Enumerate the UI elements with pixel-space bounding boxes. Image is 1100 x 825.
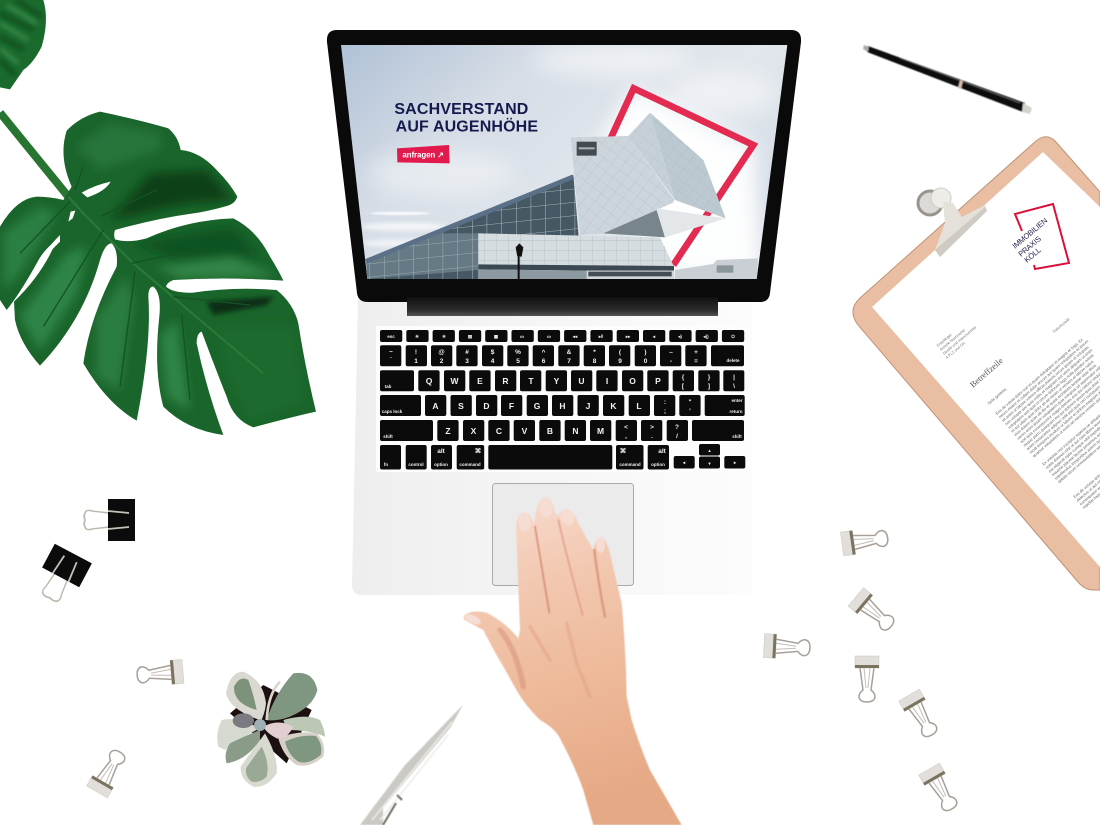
- key legends: G: [534, 401, 541, 411]
- key legends: ☀: [415, 334, 420, 339]
- letter paper: [872, 152, 1100, 567]
- key legends: /: [676, 433, 678, 440]
- key legends: P: [655, 376, 661, 386]
- key legends: shift: [383, 434, 393, 439]
- clipboard: [853, 137, 1100, 590]
- key legends: ⌘: [620, 447, 627, 455]
- key legends: ): [644, 349, 647, 356]
- corner leaf: [0, 0, 46, 89]
- key legends: *: [593, 349, 596, 356]
- key legends: ]: [708, 383, 710, 390]
- key legends: \: [733, 383, 735, 390]
- key legends: Y: [554, 376, 560, 386]
- key legends: #: [465, 349, 469, 356]
- key legends: ': [689, 408, 691, 415]
- silver clip right 1: [840, 526, 889, 556]
- key legends: B: [547, 426, 553, 436]
- key legends: X: [471, 426, 477, 436]
- key legends: `: [390, 357, 392, 364]
- key legends: ": [688, 399, 692, 406]
- key legends: 3: [465, 358, 469, 365]
- finger gaps: [500, 520, 605, 697]
- key legends: esc: [387, 334, 395, 339]
- key legends: $: [491, 349, 495, 356]
- key legends: ▭: [520, 334, 525, 339]
- keyboard well: [376, 326, 751, 472]
- silver clip right 4: [855, 656, 879, 702]
- key legends: |: [733, 374, 735, 381]
- street lamp: [516, 243, 523, 279]
- key legends: 7: [567, 358, 571, 365]
- key legends: 2: [440, 358, 444, 365]
- silver clip right 2: [848, 588, 899, 636]
- key legends: ◂): [677, 334, 682, 339]
- key legends: ▦: [494, 334, 499, 339]
- letter text: et aut ullam quia dolor sit ad minim ut veniam et labore natus: [1010, 359, 1094, 433]
- angular building: [571, 113, 726, 237]
- key legends: delete: [726, 358, 740, 363]
- key legends: M: [597, 426, 604, 436]
- letter text: Betreffzeile: [968, 355, 1005, 390]
- key legends: L: [636, 401, 642, 411]
- key legends: 4: [491, 358, 495, 365]
- key legends: R: [502, 376, 509, 386]
- key legends: ⌘: [475, 447, 482, 455]
- key legends: O: [629, 376, 636, 386]
- letter text: eius dolore quae ab illo et quasi architecto beatae vitae dicta: [1013, 362, 1098, 437]
- key legends: 1: [414, 358, 418, 365]
- laptop screen: [340, 40, 790, 290]
- key legends: <: [624, 424, 628, 431]
- silver clip right 3: [763, 634, 811, 660]
- glass hall: [366, 175, 579, 279]
- logo: [1011, 204, 1069, 269]
- letter text: Datumszeile: [1052, 317, 1071, 334]
- key legends: U: [578, 376, 585, 386]
- key legends: W: [450, 376, 459, 386]
- key legends: J: [586, 401, 591, 411]
- key legends: +: [694, 349, 698, 356]
- silver pen: [360, 705, 463, 825]
- key legends: 5: [516, 358, 520, 365]
- screen headline: AUF AUGENHÖHE: [396, 117, 538, 136]
- main leaf: [0, 112, 316, 435]
- key legends: S: [458, 401, 464, 411]
- logo: PRAXIS: [1017, 234, 1043, 259]
- key legends: control: [408, 462, 424, 467]
- key legends: >: [650, 424, 654, 431]
- trackpad: [492, 484, 634, 586]
- key legends: return: [729, 409, 743, 414]
- key legends: command: [619, 462, 641, 467]
- key legends: ▤: [468, 334, 473, 339]
- letter text: Sehr geehrte,: [986, 386, 1008, 406]
- key legends: D: [483, 401, 490, 411]
- laptop lid: [327, 30, 801, 302]
- letter text: Empfänger: [936, 332, 953, 348]
- key legends: ?: [675, 424, 679, 431]
- key legends: A: [432, 401, 439, 411]
- key legends: shift: [732, 434, 742, 439]
- key legends: 6: [542, 358, 546, 365]
- key legends: {: [682, 374, 685, 381]
- key legends: 8: [593, 358, 597, 365]
- key legends: ▾: [707, 461, 711, 466]
- key legends: V: [522, 426, 528, 436]
- key legends: [: [682, 383, 685, 390]
- key legends: (: [619, 349, 622, 356]
- letter text: Anrede Nachname: [939, 328, 966, 352]
- screen headline: SACHVERSTAND: [394, 101, 528, 118]
- key legends: ▭: [547, 334, 552, 339]
- key legends: .: [651, 433, 653, 440]
- key legends: ▴: [707, 448, 711, 453]
- logo: IMMOBILIEN: [1011, 216, 1049, 251]
- key legends: C: [496, 426, 502, 436]
- distant buildings: [675, 258, 758, 279]
- key legends: alt: [658, 448, 667, 455]
- silver clip right 6: [919, 763, 962, 815]
- key legends: :: [664, 399, 666, 406]
- pen: [863, 45, 1032, 114]
- key legends: –: [669, 349, 673, 356]
- keycaps: [380, 330, 745, 470]
- anfragen button: anfragen ↗: [402, 150, 444, 159]
- letter text: sed quia consequuntur magni dolores eos qui ratione sequi: [1019, 372, 1100, 444]
- key legends: -: [670, 358, 672, 365]
- key legends: F: [509, 401, 514, 411]
- letter text: rerum dolore et cullam dolor accum aut quam voluptatem et ipsum: [997, 338, 1090, 419]
- letter text: voluptatem sed quia et rerum dolorum fuga nulla pariatur omnis: [1007, 353, 1095, 430]
- screen headline: [394, 101, 538, 136]
- key legends: H: [559, 401, 566, 411]
- clouds: [360, 43, 780, 279]
- black binder clip 1: [84, 499, 135, 541]
- key legends: ◂◂: [572, 334, 578, 339]
- hinge: [407, 297, 718, 316]
- key legends: 0: [644, 358, 648, 365]
- red frame: [611, 88, 753, 265]
- key legends: Z: [445, 426, 451, 436]
- silver clip left 1: [136, 659, 184, 687]
- key legends: enter: [731, 398, 743, 403]
- letter text: [936, 317, 1100, 512]
- key legends: K: [610, 401, 617, 411]
- letter text: Straße und Hausnummer: [942, 325, 978, 356]
- key legends: ;: [664, 408, 666, 415]
- nails: [463, 497, 605, 627]
- keyboard: [380, 330, 745, 470]
- key legends: }: [708, 374, 711, 381]
- key legends: 9: [618, 358, 622, 365]
- key legends: =: [694, 358, 698, 365]
- key legends: tab: [385, 384, 392, 389]
- metal clip: [918, 188, 987, 257]
- key legends: N: [572, 426, 579, 436]
- silver clip left 2: [87, 746, 130, 798]
- key legends: caps lock: [382, 409, 403, 414]
- monstera leaf group: [0, 0, 316, 435]
- key legends: I: [606, 376, 608, 386]
- clipboard board: [853, 137, 1100, 590]
- key legends: ▸: [733, 460, 737, 465]
- laptop base: [352, 300, 752, 595]
- letter text: non volupta sim quia nobis et magnam aut utem aliquam ut enim: [1004, 347, 1094, 426]
- key legends: [382, 334, 743, 467]
- letter text: sit amet ut labore volorro officia dolores rerum ipsam et voluptas: [1001, 345, 1090, 423]
- anfragen button: [397, 145, 450, 163]
- key legends: %: [515, 349, 521, 356]
- silver clip right 5: [899, 689, 942, 741]
- succulent: [217, 672, 325, 787]
- stem: [0, 113, 68, 197]
- key legends: &: [567, 349, 572, 356]
- key legends: ,: [625, 433, 627, 440]
- leaf holes: [37, 182, 111, 263]
- key legends: @: [438, 349, 445, 356]
- letter text: Eos de voluta dolor sue et quam doluptatur et magna et fuga. Ex: [994, 337, 1084, 416]
- hand: [463, 497, 682, 825]
- lower deck: [478, 233, 674, 279]
- key legends: ◂: [682, 460, 686, 465]
- key legends: ◂: [652, 334, 656, 339]
- key legends: !: [415, 349, 417, 356]
- key legends: ~: [389, 349, 393, 356]
- key legends: option: [434, 462, 448, 467]
- key legends: ⏻: [731, 334, 735, 339]
- key legends: Q: [426, 376, 433, 386]
- key legends: ☀: [442, 334, 447, 339]
- letter text: 4 PLZ und Ort: [945, 341, 967, 360]
- key legends: fn: [384, 462, 388, 467]
- key legends: option: [651, 462, 665, 467]
- key legends: ▸‖: [598, 334, 603, 339]
- letter text: nemo enim ipsam voluptatem quia voluptas sit aspernatur odit: [1016, 364, 1100, 441]
- key legends: command: [459, 462, 481, 467]
- key legends: alt: [437, 448, 446, 455]
- key legends: ^: [542, 348, 546, 356]
- key legends: ▸▸: [625, 334, 631, 339]
- key legends: E: [477, 376, 483, 386]
- key legends: ◂)): [702, 334, 709, 339]
- key legends: T: [528, 376, 534, 386]
- black binder clip 2: [31, 544, 92, 608]
- logo: KÖLL: [1023, 245, 1043, 265]
